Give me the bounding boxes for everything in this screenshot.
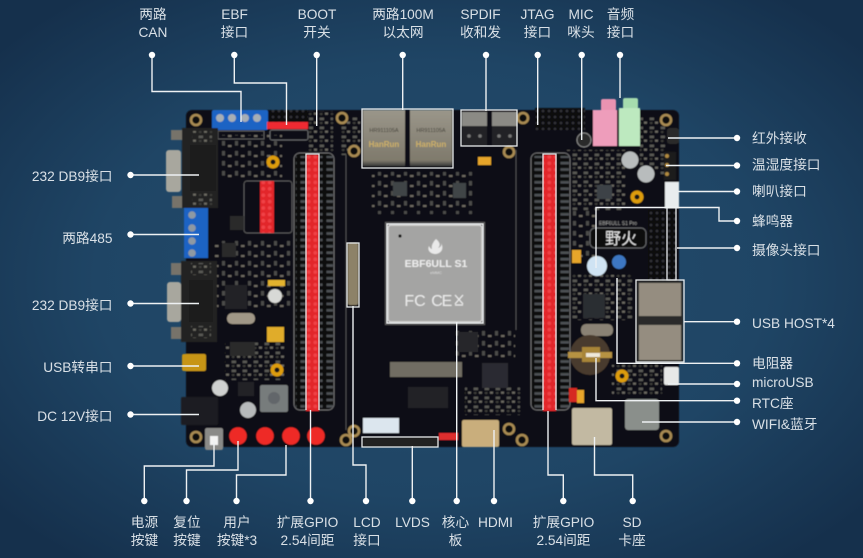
panel: board traces and small components [215,115,665,430]
highlight boxes [306,109,684,447]
label: CAN: CAN [139,25,167,40]
label: DC power: DC 12V接口 [37,408,112,424]
label: SPDIF: SPDIF [460,7,501,22]
label: USB host: USB HOST*4 [752,316,835,331]
core support chips [393,182,612,408]
connector: LCD FPC [348,243,358,305]
label: MIC: 咪头 [567,25,595,40]
label: SD card: SD [622,515,642,530]
connector: ethernet jacks: HanRun [416,140,446,149]
chips left [222,216,255,396]
label: HDMI: HDMI [478,515,513,530]
label: core board: 核心 [442,515,469,530]
label: audio: 接口 [607,24,634,40]
label: WiFi Bluetooth: WIFI&蓝牙 [752,417,817,432]
small oscillator [581,324,613,336]
IR receiver [667,128,679,144]
label: infrared: 红外接收 [752,130,807,146]
label: GPIO right: 2.54间距 [536,533,591,548]
label: DB9 top: 232 DB9接口 [32,168,112,184]
connector: HDMI [462,420,499,447]
header: small red jumpers [244,181,292,233]
label: EBF: 接口 [221,24,248,40]
label: MIC: MIC [568,7,594,22]
microphone jack [577,133,591,147]
label: GPIO right: 扩展GPIO [533,515,594,530]
label: speaker: 喇叭接口 [752,183,807,199]
label: camera: 摄像头接口 [752,242,820,258]
crystal [227,313,255,324]
core board module: C [431,293,443,310]
label: USB serial: USB转串口 [43,360,112,375]
connector: mini USB [182,354,206,371]
connector: ethernet jacks: HanRun [369,140,399,149]
label: SPDIF: 收和发 [460,25,501,40]
label: resistor: 电阻器 [752,356,793,371]
header: GPIO left [294,153,334,411]
temperature humidity pins [664,152,676,180]
label: LVDS: LVDS [395,515,430,530]
module: WiFi Bluetooth [625,399,659,430]
label: RTC: RTC座 [752,396,794,411]
connector: CAN terminal [212,110,268,139]
power switch [205,428,223,450]
label: DB9 bottom: 232 DB9接口 [32,297,112,313]
connector: USB host [637,281,683,362]
panel: PCB [186,110,679,447]
connector: ethernet jacks [363,110,452,166]
connector: LVDS [363,418,458,446]
label: reset key: 按键 [173,533,201,548]
label: LCD: LCD [353,515,381,530]
gold mounting holes [268,158,642,380]
leader lines top [149,52,623,140]
connector: micro USB [664,367,679,385]
label: temperature humidity: 温湿度接口 [752,156,820,172]
label: power key: 按键 [131,533,158,548]
core board module: E [442,293,452,310]
leader lines left [127,172,199,418]
label: reset key: 复位 [173,515,201,530]
label: JTAG: 接口 [524,24,551,40]
label: micro USB: microUSB [752,375,814,390]
speaker connector [665,182,679,208]
logo: EBF6ULL S1 Pro [599,221,637,227]
RTC battery holder [568,335,612,375]
label: LCD: 接口 [353,532,381,548]
label: BOOT: 开关 [303,25,331,40]
buzzer and potentiometer [587,255,626,276]
switch: BOOT [309,111,333,151]
label: buzzer: 蜂鸣器 [752,213,793,229]
connector: SD card [572,408,612,445]
connector: DB9 top [166,128,218,208]
leader lines bottom [141,306,636,504]
core board module: eMMC [430,270,442,275]
yellow small parts [478,157,584,403]
header: GPIO right [531,153,570,411]
label: RS485: 两路485 [62,231,113,246]
connector: RS485 terminal [184,208,208,258]
tantalum capacitors and LED [267,280,285,342]
label: GPIO left: 2.54间距 [280,533,335,548]
label: power key: 电源 [131,515,158,530]
label: CAN: 两路 [139,7,167,22]
inductor and capacitors [212,380,288,418]
label: user keys: 按键*3 [217,533,258,548]
core board module: EBF6ULL S1 [405,258,468,270]
connector: ethernet jacks: HR911105A [369,128,399,134]
connector: camera header [648,210,676,281]
label: GPIO left: 扩展GPIO [277,515,338,530]
connector: audio jacks [593,98,640,146]
label: ethernet: 两路100M [372,7,434,22]
connector: DB9 bottom [167,261,217,342]
label: EBF: EBF [221,7,248,22]
label: user keys: 用户 [223,515,251,530]
connector: ethernet jacks: HR911105A [416,128,446,134]
logo [590,221,646,248]
leader lines right [596,135,740,425]
buttons [229,427,325,445]
mounting holes [191,113,671,445]
core board module: FC [404,293,426,310]
connector: DC jack [181,397,218,425]
development board [166,98,683,450]
label: audio: 音频 [607,7,634,22]
connector: EBF module header [267,110,308,140]
label: core board: 板 [449,533,463,548]
label: BOOT: BOOT [298,7,336,22]
label: JTAG: JTAG [521,7,554,22]
core board module [385,222,485,325]
connector: SPDIF [462,112,517,146]
label: SD card: 卡座 [618,533,646,548]
connector: JTAG [535,108,585,130]
logo: 野火 [605,230,637,248]
capacitors top right [622,152,654,182]
label: ethernet: 以太网 [382,25,424,40]
